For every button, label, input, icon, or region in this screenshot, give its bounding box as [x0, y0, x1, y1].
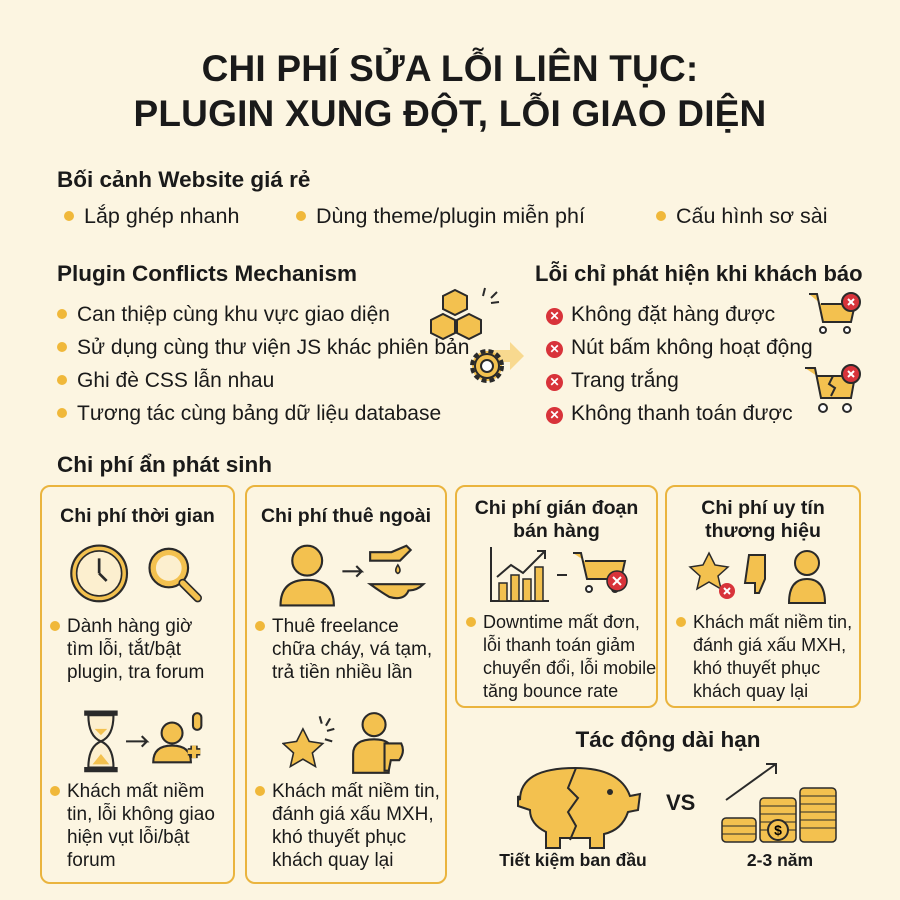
text: brand: Khách mất niềm tin, — [693, 612, 852, 632]
error list: ✕ — [549, 342, 560, 356]
panel: outsourcing cost — [245, 485, 447, 884]
label: 2-3 years: 2-3 năm — [747, 850, 813, 870]
text: time: tìm lỗi, tắt/bật — [67, 639, 181, 660]
text: reputation: khó thuyết phục — [272, 827, 406, 848]
panel: sales interruption: bán hàng — [513, 520, 600, 542]
text: downtime — [466, 612, 656, 701]
icon: freelancer patching — [279, 544, 426, 606]
icon: carts with errors — [805, 292, 861, 413]
text: downtime: lỗi thanh toán giảm — [483, 635, 635, 655]
error list: Không thanh toán được — [571, 402, 793, 425]
mechanism list: Can thiệp cùng khu vực giao diện — [77, 303, 390, 326]
title: CHI PHÍ SỬA LỖI LIÊN TỤC: — [202, 48, 698, 89]
icon: chart and cart — [490, 547, 628, 602]
text: time — [50, 616, 204, 683]
text: brand: khó thuyết phục — [693, 658, 820, 678]
text: customers — [50, 781, 215, 871]
text: freelance: trả tiền nhiều lần — [272, 662, 412, 683]
mechanism list: Ghi đè CSS lẫn nhau — [77, 369, 274, 392]
text: customers: Khách mất niềm — [67, 781, 204, 802]
icon: coin stacks: $ — [774, 822, 782, 838]
text: time: Dành hàng giờ — [67, 616, 192, 637]
panel: brand reputation — [665, 485, 861, 708]
text: customers: hiện vụt lỗi/bật — [67, 827, 190, 848]
error list — [546, 303, 813, 425]
mechanism list: Sử dụng cùng thư viện JS khác phiên bản — [77, 336, 469, 359]
icon: star and thumbs down — [282, 712, 404, 774]
heading: mechanism: Plugin Conflicts Mechanism — [57, 261, 357, 286]
text: customers: tin, lỗi không giao — [67, 804, 215, 825]
icon: star, thumbs down, person — [688, 550, 826, 604]
text: downtime: chuyển đổi, lỗi mobile — [483, 658, 656, 678]
text: reputation: đánh giá xấu MXH, — [272, 804, 434, 825]
text: reputation: khách quay lại — [272, 850, 393, 871]
context bullets: Lắp ghép nhanh — [84, 204, 239, 228]
text: downtime: tăng bounce rate — [483, 681, 618, 701]
text: VS: VS — [666, 790, 695, 815]
context bullets: Cấu hình sơ sài — [676, 204, 828, 228]
text: freelance: Thuê freelance — [272, 616, 399, 637]
text: reputation — [255, 781, 440, 871]
panel: outsourcing cost: Chi phí thuê ngoài — [261, 505, 431, 527]
panel: sales interruption: Chi phí gián đoạn — [475, 497, 638, 519]
error list: Nút bấm không hoạt động — [571, 336, 813, 359]
panel: brand reputation: thương hiệu — [705, 520, 821, 542]
icon: hourglass to user — [84, 710, 202, 772]
context bullets: Dùng theme/plugin miễn phí — [316, 204, 585, 228]
heading: errors: Lỗi chỉ phát hiện khi khách báo — [535, 261, 863, 286]
text: time: plugin, tra forum — [67, 662, 204, 683]
panel: time cost — [40, 485, 235, 884]
error list: ✕ — [549, 375, 560, 389]
heading: long-term impact: Tác động dài hạn — [575, 727, 760, 752]
title: PLUGIN XUNG ĐỘT, LỖI GIAO DIỆN — [134, 93, 766, 134]
heading: hidden costs: Chi phí ẩn phát sinh — [57, 452, 272, 477]
mechanism list — [57, 303, 469, 425]
title — [134, 48, 766, 134]
heading: context: Bối cảnh Website giá rẻ — [57, 167, 310, 192]
error list: ✕ — [549, 408, 560, 422]
icon: boxes, gear and arrow — [430, 288, 524, 383]
icon: clock and magnifier — [70, 544, 202, 602]
text: brand: khách quay lại — [693, 681, 808, 701]
text: brand: đánh giá xấu MXH, — [693, 635, 846, 655]
error list: ✕ — [549, 309, 560, 323]
error list: Không đặt hàng được — [571, 303, 775, 326]
mechanism list: Tương tác cùng bảng dữ liệu database — [77, 402, 441, 425]
text: freelance — [255, 616, 432, 683]
text: customers: forum — [67, 850, 116, 871]
panel: brand reputation: Chi phí uy tín — [701, 497, 825, 519]
text: downtime: Downtime mất đơn, — [483, 612, 640, 632]
text: reputation: Khách mất niềm tin, — [272, 781, 440, 802]
panel: time cost: Chi phí thời gian — [60, 505, 215, 527]
context bullets — [64, 204, 828, 228]
text: freelance: chữa cháy, vá tạm, — [272, 639, 432, 660]
icon: broken piggy bank — [517, 767, 642, 849]
icon: coin stacks — [721, 763, 837, 843]
error list: Trang trắng — [571, 369, 679, 392]
panel: sales interruption — [455, 485, 658, 708]
label: savings: Tiết kiệm ban đầu — [499, 850, 647, 870]
text: brand — [676, 612, 852, 701]
